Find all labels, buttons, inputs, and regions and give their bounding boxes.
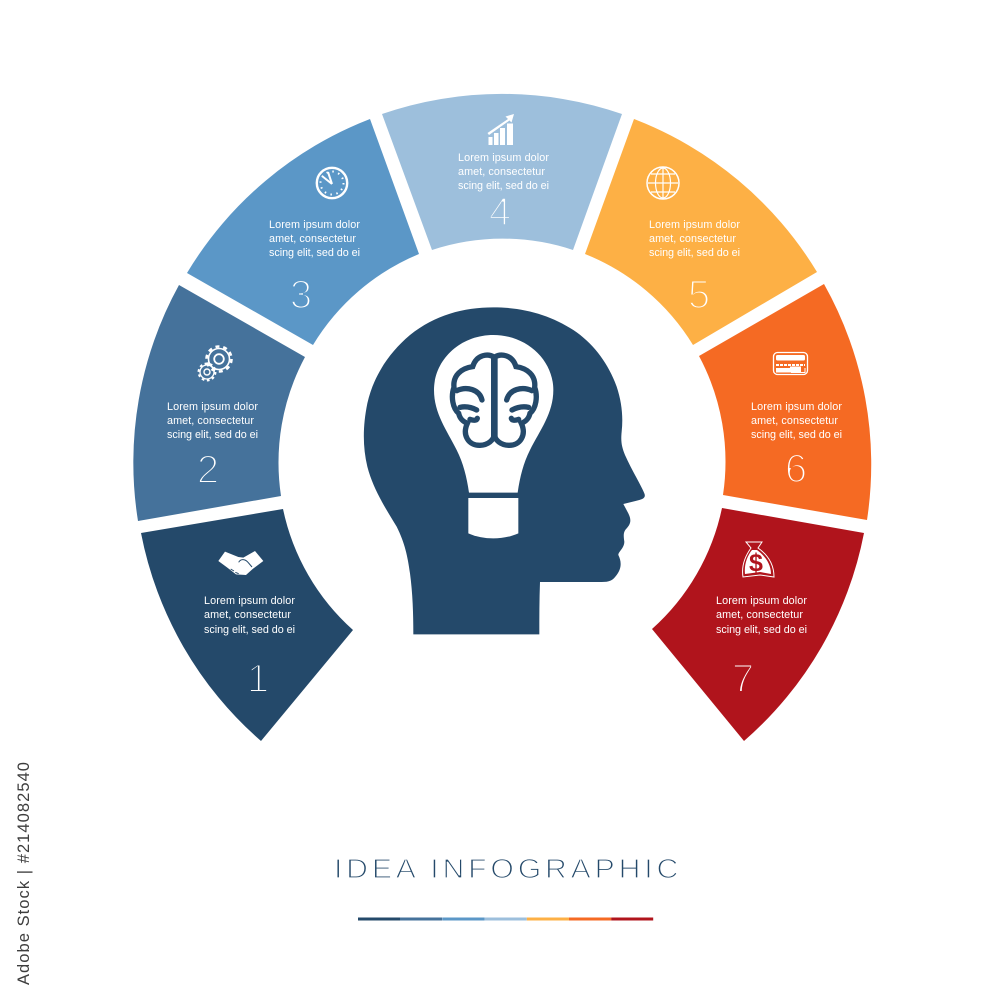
number 3: 3 — [290, 273, 312, 317]
text block 5: amet, consectetur — [649, 233, 736, 245]
icon: clock — [317, 168, 347, 198]
panel 5: globe — [585, 119, 817, 345]
number 2: 2 — [197, 448, 219, 492]
number 7: 7 — [732, 657, 754, 701]
icon: money bag: $ — [749, 549, 763, 577]
panel 3: time — [187, 119, 419, 345]
icon: money bag — [743, 542, 774, 577]
number 5: 5 — [688, 273, 710, 317]
panel 6: payment card — [699, 284, 871, 520]
text block 3: scing elit, sed do ei — [269, 247, 360, 259]
brain — [452, 355, 536, 445]
text block 4: scing elit, sed do ei — [458, 180, 549, 192]
head silhouette — [364, 307, 645, 634]
panel 4: growth — [382, 94, 622, 250]
text block 4: amet, consectetur — [458, 166, 545, 178]
head with light bulb and brain — [364, 307, 645, 634]
panel 2: settings — [133, 285, 305, 521]
icon: globe — [647, 167, 679, 199]
color legend bar — [358, 918, 653, 920]
text block 1: Lorem ipsum dolor — [204, 595, 295, 607]
text block 1: scing elit, sed do ei — [204, 624, 295, 636]
side credit: Adobe Stock | #214082540 — [15, 762, 33, 985]
bulb base — [468, 498, 518, 538]
text block 5: Lorem ipsum dolor — [649, 219, 740, 231]
number 6: 6 — [785, 447, 807, 491]
number 1: 1 — [247, 657, 269, 701]
text block 6: scing elit, sed do ei — [751, 429, 842, 441]
text block 7: Lorem ipsum dolor — [716, 595, 807, 607]
panel 1: partnership — [141, 509, 353, 741]
text block 6: Lorem ipsum dolor — [751, 401, 842, 413]
text block 3: amet, consectetur — [269, 233, 356, 245]
icon: handshake — [218, 551, 263, 575]
text block 7: amet, consectetur — [716, 609, 803, 621]
text block 5: scing elit, sed do ei — [649, 247, 740, 259]
text block 2: Lorem ipsum dolor — [167, 401, 258, 413]
text block 1: amet, consectetur — [204, 609, 291, 621]
icon: gears — [198, 346, 232, 380]
text block 2: scing elit, sed do ei — [167, 429, 258, 441]
light bulb — [434, 335, 553, 493]
number 4: 4 — [489, 190, 511, 234]
text block 7: scing elit, sed do ei — [716, 624, 807, 636]
text block 3: Lorem ipsum dolor — [269, 219, 360, 231]
panel 7: money — [652, 508, 864, 741]
icon: growth chart — [488, 114, 514, 145]
icon: credit card — [774, 352, 808, 374]
text block 6: amet, consectetur — [751, 415, 838, 427]
text block 2: amet, consectetur — [167, 415, 254, 427]
text block 4: Lorem ipsum dolor — [458, 152, 549, 164]
title: IDEA INFOGRAPHIC — [334, 854, 678, 885]
